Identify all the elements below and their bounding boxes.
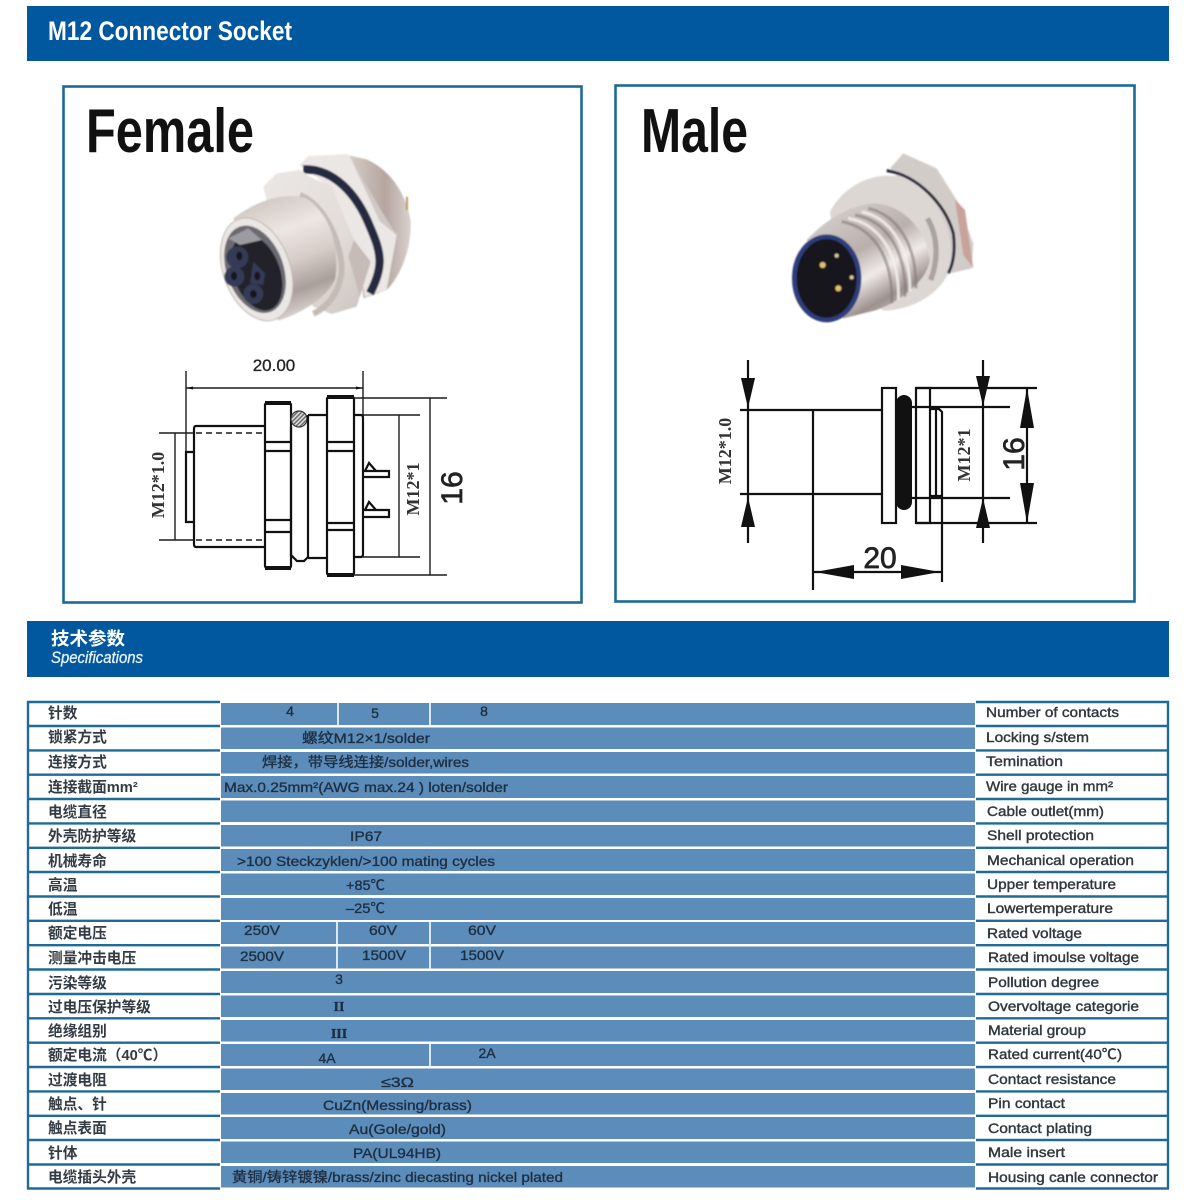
dimension label 20: 20 — [863, 542, 897, 575]
table middle value column: 黄铜/铸锌镀镍/brass/zinc diecasting nickel plated — [232, 1169, 563, 1185]
panel: male connector — [616, 86, 1134, 602]
table middle value column: Au(Gole/gold) — [349, 1121, 446, 1137]
table left label column: 连接截面mm² — [48, 778, 138, 796]
table middle value column: ≤3Ω — [381, 1074, 414, 1090]
heading: Female: Female — [86, 97, 254, 166]
table left label column: 电缆直径 — [48, 803, 107, 821]
table right label column: Rated current(40℃) — [988, 1046, 1122, 1062]
diagram: male dimensions — [715, 360, 1037, 590]
table left label column: 过电压保护等级 — [48, 998, 151, 1016]
table right label column: Lowertemperature — [987, 900, 1113, 916]
table right label column: Housing canle connector — [988, 1169, 1158, 1185]
table middle value column: 2500V — [240, 948, 285, 964]
table left label column: 针体 — [48, 1144, 78, 1162]
table middle value column: +85℃ — [346, 877, 385, 893]
banner heading English: Specifications — [51, 648, 143, 667]
table middle value column: IP67 — [350, 828, 382, 844]
table middle value column: 4 — [286, 703, 294, 719]
table middle value column: 250V — [244, 922, 281, 938]
panel: female connector — [64, 86, 582, 602]
table right label column: Shell protection — [987, 827, 1094, 843]
table left label column: 额定电流（40℃） — [48, 1046, 167, 1064]
table middle value column: 60V — [369, 922, 398, 938]
table middle value column: 60V — [468, 922, 497, 938]
specifications banner — [27, 621, 1169, 677]
table right label column: Upper temperature — [987, 876, 1116, 892]
table left label column: 外壳防护等级 — [48, 827, 136, 845]
table right label column: Temination — [986, 753, 1063, 769]
table middle value column: >100 Steckzyklen/>100 mating cycles — [237, 853, 495, 869]
table right label column: Locking s/stem — [986, 729, 1089, 745]
table right label column: Rated voltage — [987, 925, 1082, 941]
table middle value column: 焊接，带导线连接/solder,wires — [262, 754, 469, 770]
table left label column — [27, 701, 220, 1189]
table left label column: 污染等级 — [48, 974, 107, 992]
dimension label M12*1: M12*1 — [954, 428, 974, 482]
table middle value column: Max.0.25mm²(AWG max.24 ) loten/solder — [224, 779, 508, 795]
table middle value column: –25℃ — [346, 900, 385, 916]
icon: male connector photo — [794, 153, 973, 320]
banner heading Chinese: 技术参数 — [51, 628, 125, 649]
table middle value column: 4A — [318, 1050, 336, 1066]
table middle value column: CuZn(Messing/brass) — [323, 1097, 472, 1113]
table right label column: Male insert — [988, 1144, 1065, 1160]
dimension label 16: 16 — [436, 471, 469, 505]
dimension label 20.00: 20.00 — [253, 356, 295, 375]
table right label column: Wire gauge in mm² — [986, 778, 1113, 794]
table right label column: Pollution degree — [988, 974, 1099, 990]
table right label column: Contact resistance — [988, 1071, 1116, 1087]
dimension label M12*1: M12*1 — [403, 462, 423, 516]
dimension label M12*1.0: M12*1.0 — [715, 418, 735, 484]
table middle value column: 2A — [478, 1045, 496, 1061]
table middle value column: II — [334, 1000, 344, 1015]
table right label column: Pin contact — [988, 1095, 1065, 1111]
dimension label M12*1.0: M12*1.0 — [148, 452, 168, 518]
icon: female connector photo — [207, 154, 411, 331]
table right label column: Material group — [988, 1022, 1086, 1038]
dimension label 16: 16 — [998, 437, 1031, 471]
table right label column: Rated imoulse voltage — [988, 949, 1139, 965]
title text: M12 Connector Socket — [48, 16, 292, 46]
table middle value column — [221, 703, 975, 1188]
table left label column: 电缆插头外壳 — [48, 1168, 136, 1186]
specifications table — [27, 701, 1169, 1189]
table middle value column: III — [331, 1027, 347, 1042]
diagram: female dimensions — [148, 356, 469, 575]
table middle value column: 8 — [480, 703, 488, 719]
table left label column: 触点、针 — [48, 1095, 107, 1113]
table right label column: Number of contacts — [986, 704, 1119, 720]
table right label column: Contact plating — [988, 1120, 1092, 1136]
table left label column: 额定电压 — [48, 924, 107, 942]
table left label column: 触点表面 — [48, 1119, 107, 1137]
table left label column: 过渡电阻 — [48, 1071, 107, 1089]
table middle value column: 3 — [335, 971, 343, 987]
table left label column: 测量冲击电压 — [48, 950, 136, 967]
table right label column: Overvoltage categorie — [988, 998, 1139, 1014]
table left label column: 连接方式 — [48, 753, 107, 771]
table left label column: 针数 — [48, 704, 78, 722]
heading: Male: Male — [641, 97, 748, 166]
table right label column — [976, 701, 1169, 1189]
table right label column: Cable outlet(mm) — [987, 803, 1104, 819]
table left label column: 锁紧方式 — [48, 728, 107, 746]
table right label column: Mechanical operation — [987, 852, 1134, 868]
table left label column: 高温 — [48, 876, 78, 894]
title banner — [27, 6, 1169, 61]
table middle value column: 5 — [371, 705, 379, 721]
table middle value column: 螺纹M12×1/solder — [302, 730, 430, 746]
table left label column: 机械寿命 — [48, 852, 107, 870]
table middle value column: 1500V — [362, 947, 407, 963]
table middle value column: PA(UL94HB) — [353, 1145, 441, 1161]
table left label column: 绝缘组别 — [48, 1022, 107, 1040]
table middle value column: 1500V — [460, 947, 505, 963]
table left label column: 低温 — [48, 900, 78, 918]
